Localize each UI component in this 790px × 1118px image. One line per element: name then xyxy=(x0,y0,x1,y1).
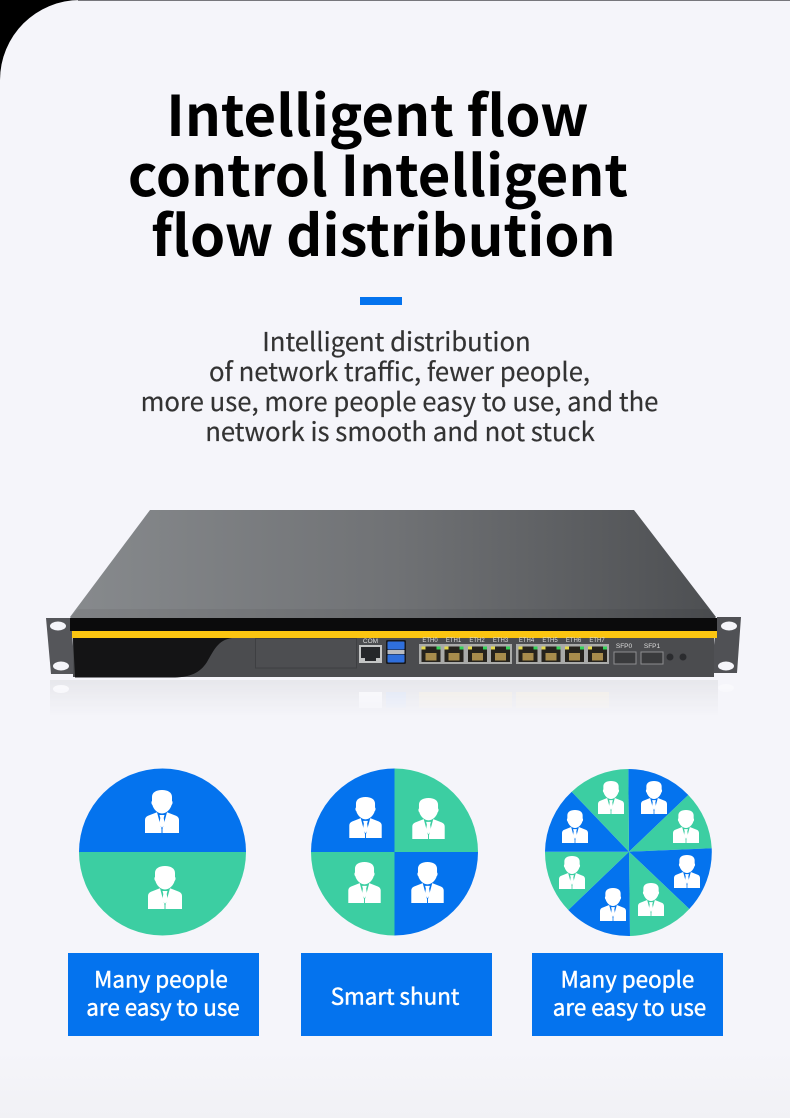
black top band xyxy=(70,618,717,631)
label: many people 1: Many people xyxy=(94,962,228,994)
COM port xyxy=(359,638,382,663)
lid xyxy=(70,510,716,617)
ETH port labels: ETH2 xyxy=(469,638,485,644)
yellow stripe xyxy=(72,631,717,638)
ETH port labels: ETH3 xyxy=(493,638,509,644)
ETH port labels xyxy=(422,638,605,644)
device reflection xyxy=(50,680,718,704)
label: smart shunt: Smart shunt xyxy=(331,980,460,1012)
label: many people 1: are easy to use xyxy=(86,990,240,1022)
title: flow distribution xyxy=(151,192,616,273)
SFP ports: SFP1 xyxy=(644,643,661,650)
accent bar xyxy=(360,297,402,305)
front panel xyxy=(73,638,714,677)
title: control Intelligent xyxy=(128,132,628,213)
left rack bracket xyxy=(46,618,75,674)
description text: Intelligent distribution xyxy=(262,322,531,359)
label: many people 2: are easy to use xyxy=(553,990,706,1022)
SFP ports: SFP0 xyxy=(616,643,633,650)
ETH port group 2 xyxy=(516,644,609,664)
right rack bracket xyxy=(711,617,741,673)
ETH port labels: ETH5 xyxy=(542,638,558,644)
label: many people 2 xyxy=(532,953,723,1036)
circle: four shares xyxy=(311,768,478,936)
lid front lip xyxy=(70,609,716,618)
ETH port labels: ETH6 xyxy=(566,638,582,644)
description text: of network traffic, fewer people, xyxy=(209,352,590,389)
LED indicators xyxy=(666,654,686,660)
circle: eight shares xyxy=(545,769,712,936)
ETH port labels: ETH4 xyxy=(519,638,535,644)
description text xyxy=(141,322,658,449)
ETH port group 1 xyxy=(419,644,512,664)
blank plate xyxy=(256,638,356,668)
black curved section xyxy=(73,638,232,678)
title: Intelligent flow xyxy=(166,72,589,153)
label: many people 2: Many people xyxy=(561,962,694,994)
ETH port labels: ETH7 xyxy=(589,638,605,644)
label: many people 1 xyxy=(68,953,259,1036)
COM port: COM xyxy=(363,638,378,645)
title xyxy=(128,72,628,273)
ETH port labels: ETH1 xyxy=(446,638,462,644)
USB ports xyxy=(386,640,406,664)
server device xyxy=(46,510,741,678)
description text: network is smooth and not stuck xyxy=(205,412,595,449)
description text: more use, more people easy to use, and the xyxy=(141,382,658,419)
SFP ports xyxy=(614,643,663,664)
label: smart shunt xyxy=(301,953,492,1036)
circle: two shares xyxy=(79,769,246,936)
ETH port labels: ETH0 xyxy=(422,638,438,644)
